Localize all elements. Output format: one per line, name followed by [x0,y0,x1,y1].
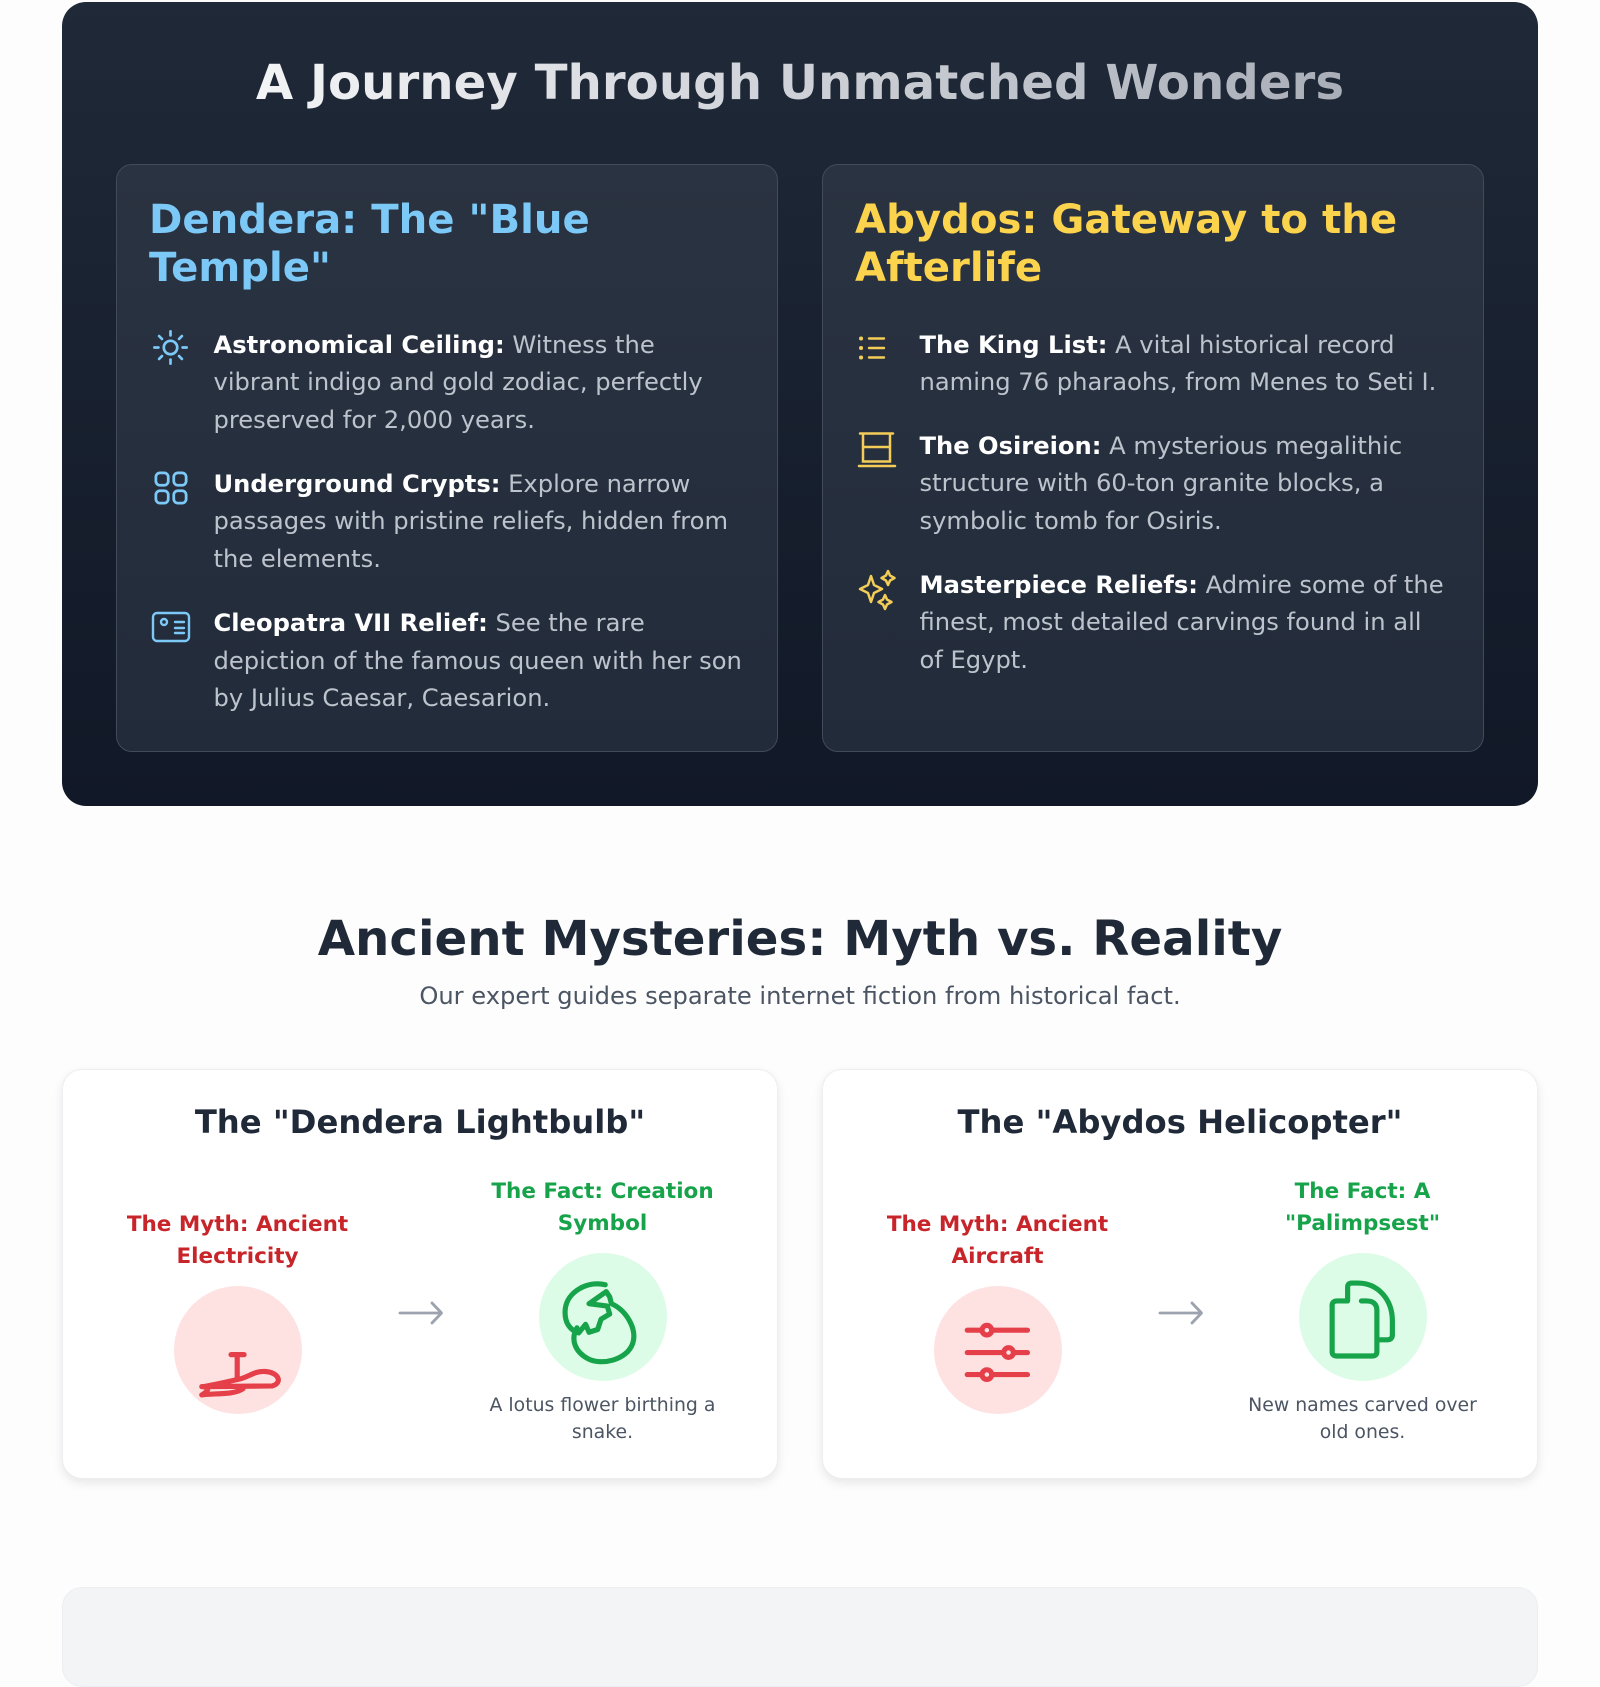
fact circle: creation [538,1253,666,1381]
caption: palimpsest: old ones. [1320,1422,1405,1443]
text: underground crypts: the elements. [214,545,381,573]
panel: Dendera [116,164,778,752]
myth label: aircraft [886,1212,1108,1268]
text: masterpiece reliefs: Masterpiece Reliefs: Admire some of the [920,571,1444,599]
heading: Dendera [149,197,590,291]
heading: Abydos: Afterlife [855,245,1042,291]
heading: myth vs reality: Ancient Mysteries: Myth vs. Reality [318,910,1282,966]
icon: lightbulb squiggle [199,1352,281,1398]
myth circle: electricity [174,1286,302,1414]
text: osireion: The Osireion: A mysterious megalithic [920,432,1402,460]
arrow [398,1302,443,1324]
heading: Dendera: Temple" [149,245,331,291]
caption: lotus: snake. [572,1422,633,1443]
myth circle: aircraft [934,1286,1062,1414]
text: king list [920,330,1436,396]
text: cleopatra relief: by Julius Caesar, Caesarion. [214,684,550,712]
heading: Abydos [855,197,1397,291]
panel: Dendera lightbulb [62,1069,778,1479]
heading: Dendera: Dendera: The "Blue [149,197,590,243]
text: osireion: structure with 60-ton granite blocks, a [920,469,1384,497]
text: astronomical ceiling [214,330,703,434]
text: masterpiece reliefs: finest, most detailed carvings found in all [920,608,1422,636]
panel: Abydos [822,164,1484,752]
text: king list: The King List: A vital historical record [920,330,1394,358]
icon: id card [152,612,190,642]
text: cleopatra relief [214,609,742,712]
myth label: electricity: Electricity [176,1244,299,1268]
text: astronomical ceiling: preserved for 2,000 years. [214,406,535,434]
arrow [1158,1302,1203,1324]
card heading: lightbulb: The "Dendera Lightbulb" [195,1103,645,1141]
text: underground crypts: Underground Crypts: Explore narrow [214,470,690,498]
myth label: electricity: The Myth: Ancient [127,1212,348,1236]
fact label: creation symbol: The Fact: Creation [491,1179,714,1204]
text: underground crypts [214,470,728,573]
text: underground crypts: passages with pristine reliefs, hidden from [214,507,728,535]
myth label: aircraft: The Myth: Ancient [887,1212,1108,1236]
fact label: palimpsest: The Fact: A [1295,1179,1430,1204]
caption: lotus [490,1395,715,1443]
icon: list [859,336,886,360]
caption: palimpsest [1248,1395,1477,1443]
text: cleopatra relief: depiction of the famous queen with her son [214,647,742,675]
text: cleopatra relief: Cleopatra VII Relief: See the rare [214,609,645,637]
icon: sliders [964,1322,1030,1382]
fact circle: palimpsest [1298,1253,1426,1381]
heading: Abydos: Abydos: Gateway to the [855,197,1397,243]
fact label: creation symbol [491,1179,714,1236]
text: masterpiece reliefs [920,571,1444,674]
fact label: palimpsest: "Palimpsest" [1285,1211,1440,1236]
caption: palimpsest: New names carved over [1248,1395,1477,1416]
icon: osireion [858,432,896,468]
myth label: aircraft: Aircraft [951,1244,1044,1268]
text: astronomical ceiling: Astronomical Ceiling: Witness the [214,330,655,358]
caption: lotus: A lotus flower birthing a [490,1395,715,1416]
text: osireion: symbolic tomb for Osiris. [920,507,1222,535]
text: masterpiece reliefs: of Egypt. [920,646,1028,674]
myth label: electricity [126,1212,348,1268]
icon: sparkles [858,570,896,610]
icon: sun [153,330,188,365]
subheading: Our expert guides separate internet fiction from historical fact. [419,982,1181,1010]
card heading: helicopter: The "Abydos Helicopter" [958,1103,1402,1141]
icon: documents [1330,1280,1395,1359]
icon: squares [154,472,188,504]
panel: bottom section [62,1587,1538,1687]
panel: journey through wonders [62,2,1538,806]
text: astronomical ceiling: vibrant indigo and gold zodiac, perfectly [214,368,703,396]
panel: Abydos helicopter [822,1069,1538,1479]
fact label: creation symbol: Symbol [558,1211,647,1236]
title: A Journey Through Unmatched Wonders [256,54,1344,110]
fact label: palimpsest [1285,1179,1440,1236]
icon: egg [562,1281,636,1364]
text: osireion [920,432,1402,535]
text: king list: naming 76 pharaohs, from Menes to Seti I. [920,368,1436,396]
